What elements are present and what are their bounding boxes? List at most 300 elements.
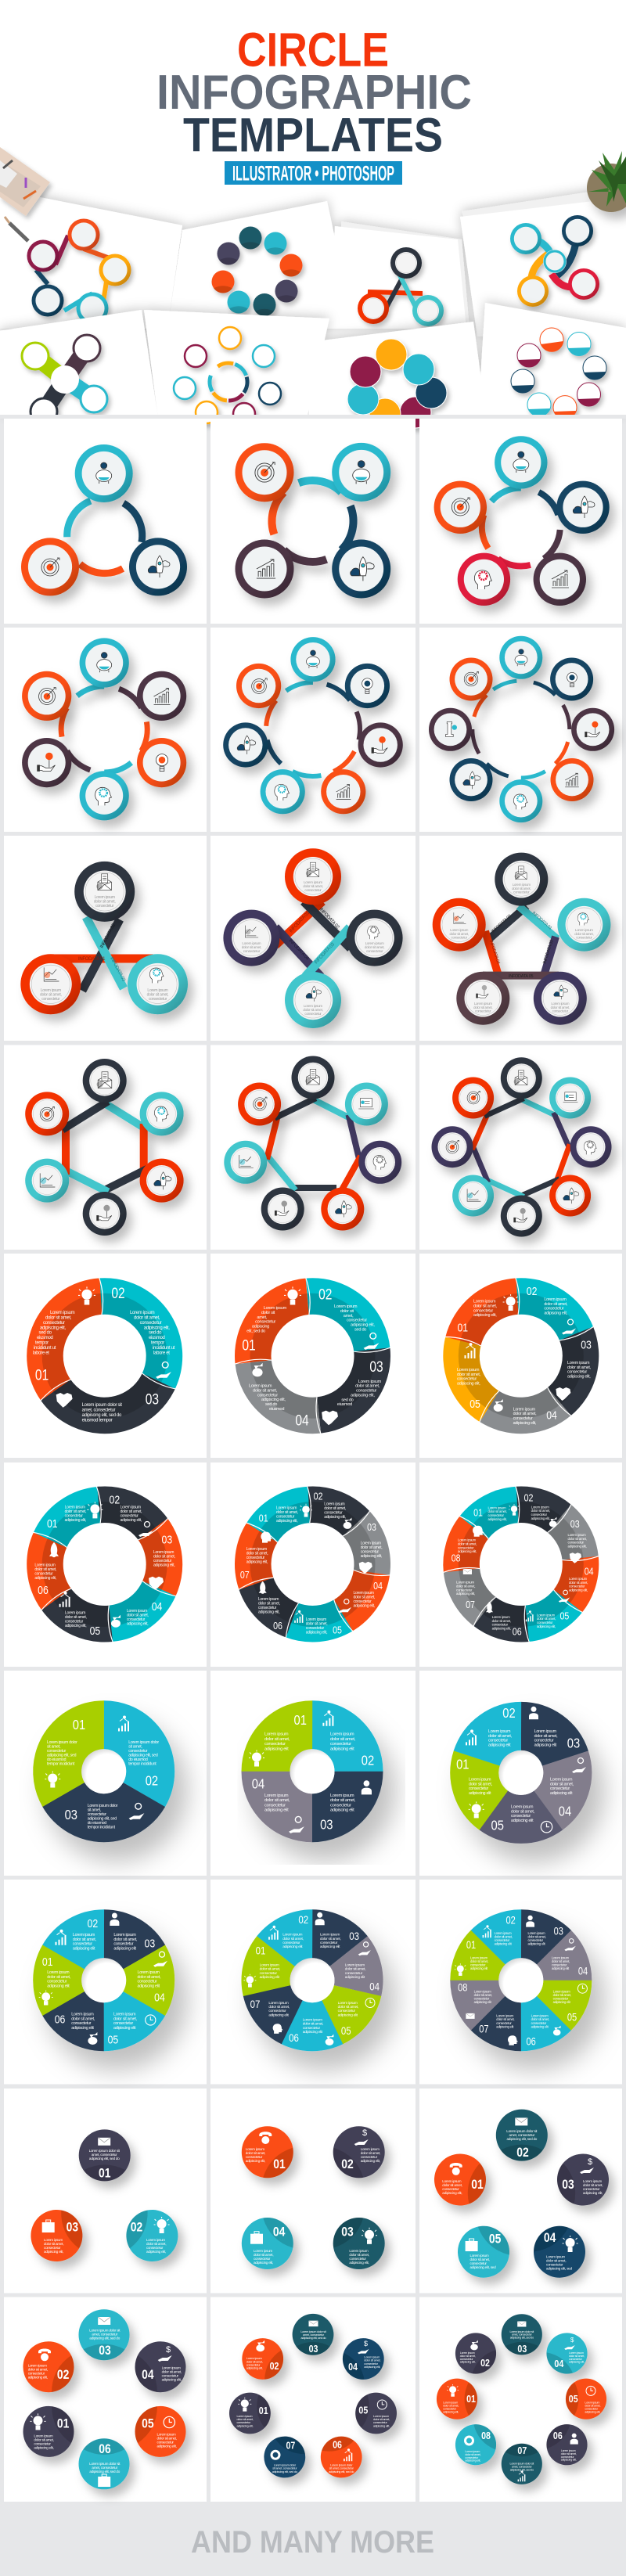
panel: 8 blobs [419,2297,622,2502]
numbers: 06 [333,2438,342,2451]
labels: Lorem ipsum [364,2356,380,2359]
collage diagram: eight small blobs [211,226,303,316]
labels: Lorem ipsum [488,1506,506,1509]
panel: 6-segment pie ring [4,1880,207,2085]
labels: adipiscing elit, [569,2361,585,2364]
labels: dolor sit amet, [162,2369,182,2373]
labels: consectetur [162,2373,179,2377]
labels: sit amet, consectetur [329,2467,354,2470]
labels: consectetur [469,1786,488,1791]
labels: dolor sit amet, [585,2405,600,2408]
labels: consectetur [47,1980,67,1984]
panel: 6-segment donut [4,1462,207,1667]
numbers: 01 [466,2393,476,2405]
labels [44,2149,166,2254]
labels: dolor sit amet, [73,1937,96,1942]
labels [47,1740,159,1829]
labels: consectetur [330,1803,351,1808]
node text: dolor sit amet, [303,1008,323,1012]
collage diagram: ring with arrows [174,327,281,425]
numbers: 02 [318,1286,332,1303]
labels: adipiscing elit, [246,1560,268,1564]
labels: Lorem ipsum [146,2238,165,2242]
numbers: 01 [471,2178,484,2192]
labels: consectetur [474,1996,490,2000]
labels: dolor sit amet, [264,1798,290,1803]
labels: consectetur [349,2257,366,2261]
numbers [466,2343,578,2456]
labels: consectetur [537,1621,553,1624]
icons: $ [588,2157,592,2167]
strip labels [78,923,126,983]
labels: adipiscing elit, [585,2410,600,2413]
labels: Lorem ipsum [531,2014,549,2018]
labels: Lorem ipsum dolor sit [89,2462,121,2466]
nodes [432,1057,612,1236]
labels: dolor sit amet, [138,1975,161,1980]
labels: sit amet, [47,1744,60,1749]
labels: adipiscing elit, sed [470,2265,496,2269]
labels: adipiscing elit [550,1791,573,1796]
labels: consectetur [583,2187,600,2191]
labels [33,1311,175,1423]
numbers [42,1917,165,2046]
labels: Lorem ipsum [465,2450,480,2453]
panel: 5-segment donut [419,1254,622,1458]
labels: adipiscing elit, [488,1517,507,1521]
labels: Lorem ipsum [65,1610,85,1615]
labels: consectetur [128,1749,148,1754]
labels [264,1732,356,1813]
panel: 3-node strip triangle [4,836,207,1041]
labels: dolor sit amet, [456,1585,475,1588]
labels: consectetur [257,1393,278,1398]
numbers [471,2146,574,2247]
labels: dolor sit amet, [473,1304,498,1309]
numbers: 06 [99,2442,111,2456]
numbers: 07 [466,1599,475,1610]
numbers [35,1285,159,1408]
labels: dolor sit amet, [443,2405,459,2408]
panel: 7-segment pie ring [210,1880,416,2085]
labels: adipiscing elit, sed do [89,2470,121,2473]
numbers: 06 [38,1584,49,1596]
labels: dolor sit amet, [531,1509,550,1513]
labels: adipiscing elit, [537,1624,556,1628]
numbers: 02 [527,1285,537,1297]
blobs [226,2314,400,2485]
labels: dolor sit amet, [156,2437,177,2441]
labels: Lorem ipsum [527,1931,545,1935]
strip labels: INFODATA 03 [109,956,126,983]
panel: 4-node strip diamond [210,836,416,1041]
numbers: 04 [544,2231,556,2245]
labels: consectetur [531,2021,547,2025]
labels: consectetur [356,1389,376,1394]
labels: Lorem ipsum dolor [274,2464,297,2467]
labels: Lorem ipsum [469,1778,491,1783]
ring arcs [453,662,588,797]
labels: Lorem ipsum dolor [47,1740,77,1745]
labels: adipiscing elit [345,1975,365,1980]
labels: dolor sit [340,1309,354,1314]
icons [237,650,387,801]
labels: Lorem ipsum [550,1778,573,1783]
labels: Lorem ipsum [585,2402,599,2405]
labels: adipiscing elit, [531,1516,550,1520]
numbers: 07 [250,1998,260,2010]
labels: dolor sit amet, [260,1967,280,1972]
numbers: 02 [505,1914,516,1927]
labels: labore et [153,1351,170,1355]
node text: consectetur [149,997,167,1002]
labels: consectetur [246,2363,261,2366]
labels: amet, consectetur [303,2333,325,2337]
node text: dolor sit amet, [473,1006,492,1009]
numbers: 02 [502,1706,516,1721]
labels: adipiscing elit, sed [128,1753,158,1758]
labels: dolor sit amet, [550,1782,574,1786]
collage diagram: five linked circles [27,219,131,324]
labels: adipiscing elit, [544,1311,568,1315]
panel: 5-segment pie ring [419,1671,622,1876]
labels: consectetur [553,1996,569,2000]
labels: amet, consectetur [512,2333,533,2337]
labels: consectetur [246,1556,264,1560]
labels: consectetur [320,1941,338,1945]
labels: dolor sit [261,1311,275,1315]
labels: consectetur [569,1585,585,1588]
panel: 3 blobs [4,2089,207,2293]
labels: Lorem ipsum [495,1931,512,1935]
labels: consectetur [140,1321,162,1326]
labels: consectetur [456,1588,473,1592]
header: white background with collage [0,0,626,430]
panel: 7-node strip heptagon [210,1045,416,1250]
labels: Lorem ipsum [361,1541,381,1545]
icons [452,452,595,589]
labels: adipiscing elit [474,2000,492,2004]
labels: Lorem ipsum [113,2013,136,2017]
labels: dolor sit amet, [544,1302,568,1307]
panel: 6 blobs [4,2297,207,2502]
labels: Lorem ipsum [345,1963,365,1967]
numbers: 01 [293,1713,307,1728]
numbers: 05 [491,1818,504,1833]
labels [442,2129,603,2270]
icons [450,2117,594,2252]
labels: adipiscing elit, [44,2250,63,2254]
nodes [433,853,610,1025]
labels: consectetur [246,2155,263,2159]
labels: adipiscing elit [268,2013,290,2017]
icons [466,1707,586,1833]
icons [45,1715,144,1820]
strip labels: INFODATA 02 [491,914,513,934]
pie segments [266,1725,358,1818]
collage diagram: spiral with centre ring [510,215,599,307]
numbers: 05 [108,2034,119,2046]
node text [450,883,594,1013]
labels: dolor sit amet, [567,1365,592,1370]
node text: dolor sit amet, [94,900,116,905]
node text: Lorem ipsum [242,941,261,945]
node text: consectetur [304,888,322,892]
node text: consectetur [304,1012,322,1016]
labels: consectetur [113,2021,133,2026]
labels: adipiscing elit, [261,1398,286,1402]
labels: sit amet, [128,1744,142,1749]
title: INFOGRAPHIC: INFOGRAPHIC [156,66,472,120]
panel: 3-segment pie ring [4,1671,207,1876]
labels: consectetur [44,2246,61,2250]
labels: Lorem ipsum [162,2366,181,2369]
labels: dolor sit amet, [361,1545,382,1550]
blobs [23,2129,186,2270]
labels: adipiscing elit [531,2024,549,2028]
labels: adipiscing elit [511,1819,534,1823]
numbers: 01 [99,2167,111,2181]
labels [443,2330,600,2471]
labels: amet, consectetur [509,2133,535,2137]
icons [49,1502,164,1628]
donut segments [235,1278,390,1434]
labels: dolor sit amet, [349,2253,369,2257]
numbers: 02 [270,2360,279,2372]
labels: Lorem ipsum [553,1989,570,1993]
labels: consectetur [127,1617,146,1622]
labels: dolor sit amet, [458,1542,477,1545]
numbers: 01 [47,1517,58,1531]
labels: consectetur [546,2262,563,2266]
numbers: 08 [481,2430,491,2441]
node text: dolor sit amet, [574,932,594,936]
labels: adipiscing elit [496,2024,514,2028]
labels: consectetur [65,1514,83,1519]
labels: adipiscing elit, sed do [272,2470,297,2473]
numbers: 06 [289,2031,299,2044]
labels: Lorem ipsum [460,2351,475,2355]
labels: consectetur [34,2442,51,2446]
donut segments [21,1480,188,1648]
icons: $ [570,2337,574,2344]
nodes [223,848,403,1028]
labels: adipiscing elit, [458,1549,477,1553]
labels: adipiscing elit [534,1743,557,1747]
node text: Lorem ipsum [474,1002,492,1006]
labels: Lorem ipsum [264,1306,287,1311]
strip labels: INFODATA 01 [531,911,552,931]
icons [239,1069,387,1218]
labels: dolor sit amet, [246,2151,265,2155]
labels: consectetur [88,1812,106,1817]
badge: Illustrator + Photoshop [225,161,402,185]
numbers: 01 [73,1718,85,1732]
numbers: 03 [554,1926,563,1937]
node text: Lorem ipsum [95,895,115,900]
nodes [20,862,188,1014]
labels: consectetur [254,2257,271,2261]
ring arcs [246,663,380,796]
labels: adipiscing elit, [567,1374,591,1379]
labels: Lorem ipsum [34,1563,56,1567]
panel: 7-node ring [210,628,416,832]
labels: dolor sit amet, [282,1937,304,1941]
blobs [429,2110,614,2288]
numbers: 03 [562,2178,574,2192]
labels: Lorem ipsum [258,1597,279,1602]
labels: adipiscing elit [282,1945,303,1949]
labels: adipiscing elit [469,1791,491,1796]
strips [473,1099,569,1196]
numbers: 03 [517,2343,527,2355]
collage diagram: X shape [22,335,107,425]
nodes [434,436,610,606]
labels: sed do [341,1398,354,1402]
labels: adipiscing elit [260,1975,280,1980]
labels: consectetur [146,2246,164,2250]
numbers: 02 [516,2146,529,2160]
numbers [457,1285,592,1422]
labels: consectetur [47,1749,66,1754]
title: TEMPLATES: TEMPLATES [183,108,443,161]
labels: dolor sit amet, [492,1619,511,1623]
node text: consectetur [576,936,592,940]
labels: elit, sed do [246,1329,265,1333]
labels: Lorem ipsum [303,2017,322,2022]
nodes [224,1056,401,1230]
nodes [235,443,390,598]
pie segments [455,1915,587,2046]
labels: consectetur [276,1515,295,1520]
labels: do eiusmod [128,1758,148,1762]
labels: Lorem ipsum [113,1933,136,1937]
labels: adipiscing elit, [246,2159,265,2163]
labels: Lorem ipsum [513,1407,536,1412]
labels: Lorem ipsum [324,1502,345,1506]
numbers [458,1914,588,2048]
numbers: 01 [42,1955,53,1968]
labels: dolor sit amet, [527,1935,546,1939]
numbers: 06 [273,1620,282,1632]
numbers: 03 [144,1937,156,1950]
numbers: 02 [146,1773,158,1789]
labels: adipiscing elit [320,1945,340,1949]
labels: dolor sit amet, [531,2017,549,2021]
collage diagram: triangle of strips [358,247,444,326]
numbers: 04 [154,1991,165,2004]
labels: dolor sit amet, [561,2452,577,2455]
numbers: 05 [142,2416,154,2431]
labels: consectetur [361,1549,379,1554]
labels: adipiscing elit, [153,1563,174,1568]
prop: desk tray [0,147,50,216]
labels: Lorem ipsum [443,2402,458,2405]
labels: Lorem ipsum dolor [330,2464,353,2467]
node text: consectetur [243,949,261,953]
panel: 8-segment pie ring [419,1880,622,2085]
numbers: 03 [341,2225,354,2240]
labels: Lorem ipsum [358,1380,382,1384]
numbers: 06 [553,2430,563,2441]
labels: dolor sit amet, [45,1315,72,1320]
labels: dolor sit amet, [28,2368,48,2372]
labels: Lorem ipsum [264,1732,289,1737]
labels: adipiscing elit [264,1747,289,1751]
numbers: 04 [348,2361,358,2373]
panel: 4-node ring [210,419,416,624]
labels: Lorem ipsum [496,2014,514,2018]
labels: adipiscing elit, [162,2377,182,2381]
numbers [240,1490,383,1636]
labels: dolor sit amet, [276,1510,298,1515]
labels: dolor sit amet, [354,1595,375,1599]
labels: adipiscing elit, [465,2459,480,2463]
prop: potted plant [587,151,626,212]
labels: consectetur [531,1513,548,1516]
numbers: 01 [259,1512,268,1524]
labels: dolor sit amet, [511,1809,535,1814]
node text: Lorem ipsum [41,988,61,993]
labels: Lorem ipsum [320,1933,340,1937]
panel: 6-node ring [4,628,207,832]
labels: consectetur [303,2026,320,2031]
labels: Lorem ipsum [121,1506,141,1510]
labels: consectetur [264,1803,286,1808]
labels: consectetur [460,2358,473,2361]
strips [268,1099,359,1205]
labels: amet, consectetur [92,2333,118,2337]
numbers: 03 [570,1518,580,1530]
numbers: 03 [99,2344,111,2358]
labels: Lorem ipsum dolor sit [89,2149,121,2153]
labels: adipiscing elit, [156,2445,177,2448]
numbers: 03 [320,1817,333,1833]
labels: consectetur [347,1319,367,1323]
labels: adipiscing elit, [236,2424,254,2427]
labels: dolor sit amet, [355,1384,380,1389]
labels: consectetur [442,2187,459,2191]
labels: Lorem ipsum dolor [88,1804,118,1808]
labels: dolor sit amet, [44,2242,63,2246]
labels: dolor sit amet, [495,1935,513,1939]
labels: Lorem ipsum [330,1793,354,1798]
panel: 3-segment donut [4,1254,207,1458]
panel: 8-node strip octagon [419,1045,622,1250]
labels: consectetur [324,1510,343,1515]
icons [56,1286,171,1408]
labels: consectetur [338,2009,355,2013]
blobs [437,2314,606,2484]
labels: do eiusmod [47,1758,67,1762]
labels: Lorem ipsum [260,1963,279,1967]
labels: adipiscing elit [470,1966,488,1970]
panel: 7-segment donut [210,1462,416,1667]
numbers: 06 [526,2036,536,2048]
labels: adipiscing elit, [583,2191,603,2195]
node text [40,895,168,1002]
labels: adipiscing elit, [569,1588,588,1592]
labels: Lorem ipsum [338,2001,358,2006]
labels: consectetur [457,1377,477,1382]
labels: Lorem ipsum [330,1732,354,1737]
labels: dolor sit amet, [553,1993,571,1997]
labels: eiusmod [269,1407,284,1412]
icons: $ [364,2340,368,2348]
labels: consectetur [34,1571,53,1576]
labels [469,1729,574,1823]
node text: dolor sit amet, [365,945,384,949]
